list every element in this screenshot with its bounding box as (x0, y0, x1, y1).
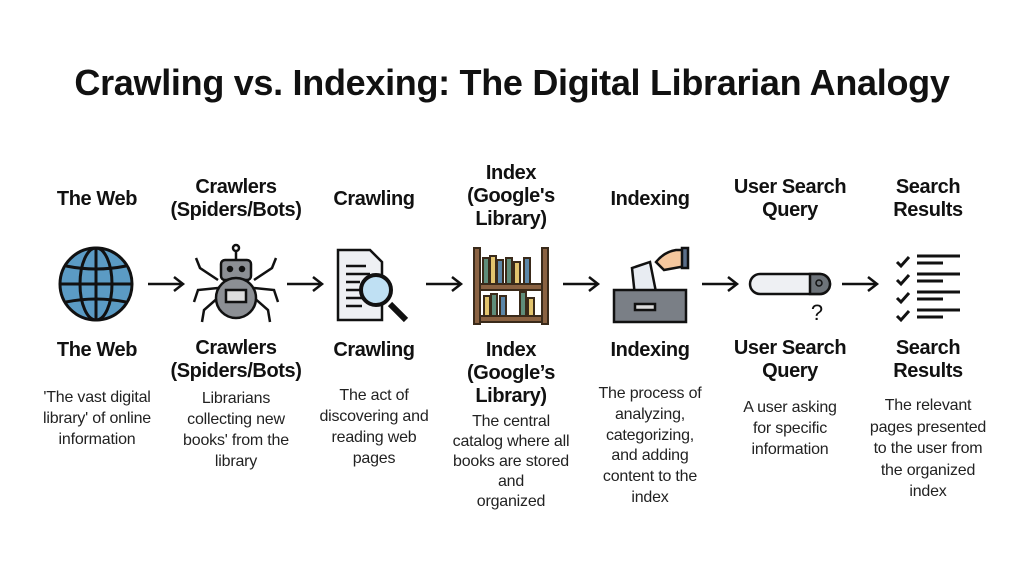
arrow (287, 277, 322, 291)
column: Search Results: Search Results (893, 337, 963, 382)
column: Crawling: Crawling (333, 339, 415, 361)
column: Index: and (498, 473, 524, 490)
column: Index: The central catalog where all books are stored (453, 413, 569, 470)
icon: document with magnifier (338, 250, 406, 320)
column: Crawling (319, 339, 429, 467)
icons row (58, 244, 960, 325)
arrow (842, 277, 877, 291)
column: The Web: 'The vast digital library' of online information (43, 389, 151, 448)
column: Crawlers (170, 337, 302, 470)
icon: globe (60, 248, 132, 320)
column: Indexing: Indexing (610, 339, 690, 361)
top label: Crawling: Crawling (333, 188, 415, 210)
top label: Indexing: Indexing (610, 188, 690, 210)
arrow (702, 277, 737, 291)
title: Crawling vs. Indexing: The Digital Librarian Analogy (74, 62, 950, 103)
top label: Crawlers: Crawlers (Spiders/Bots) (170, 176, 302, 221)
icon: results list (897, 256, 960, 320)
column: Crawlers: Crawlers (Spiders/Bots) (170, 337, 302, 382)
column: Index: Index (Google’s Library) (467, 339, 555, 407)
arrow (563, 277, 598, 291)
column: The Web (43, 339, 151, 448)
column: Index (453, 339, 569, 510)
column: Search Results: The relevant pages presented to the user from the organized index (870, 397, 986, 500)
column: Indexing: The process of analyzing, categorizing, and adding content to the index (598, 385, 702, 506)
top label: Search Results: Search Results (893, 176, 963, 221)
icon: search bar: ? (811, 300, 823, 325)
column: User Search Query: User Search Query (734, 337, 846, 382)
column: Search Results (870, 337, 986, 500)
column: Crawlers: Librarians collecting new books' from the library (183, 390, 289, 470)
top label: Index: Index (Google's Library) (467, 162, 555, 230)
top label: User Search Query: User Search Query (734, 176, 846, 221)
column: User Search Query (734, 337, 846, 458)
arrow (148, 277, 183, 291)
icon: robot spider (194, 245, 278, 322)
top label: The Web: The Web (57, 188, 137, 210)
icon: bookshelf (474, 248, 548, 324)
column: Crawling: The act of discovering and reading web pages (319, 387, 429, 467)
column: The Web: The Web (57, 339, 137, 361)
icon: filing tray (614, 248, 688, 322)
column: User Search Query: A user asking for specific information (743, 399, 837, 458)
column: Index: organized (477, 493, 545, 510)
arrow (426, 277, 461, 291)
icon: search bar (750, 274, 830, 325)
